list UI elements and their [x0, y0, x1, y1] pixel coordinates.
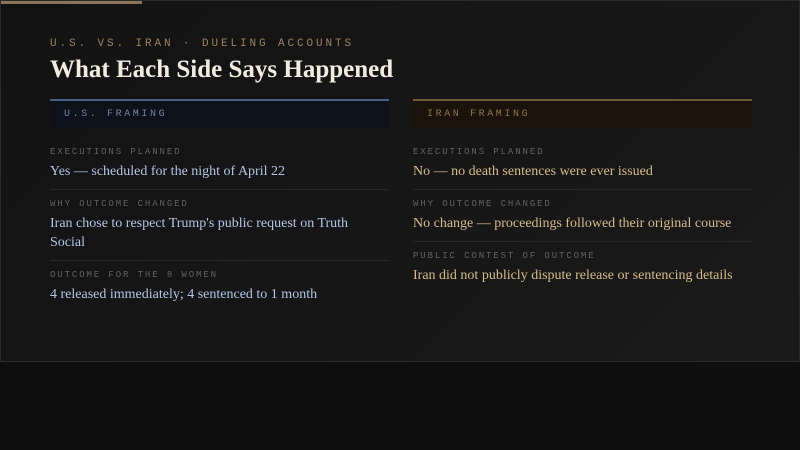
eyebrow: U.S. VS. IRAN · DUELING ACCOUNTS [50, 38, 354, 50]
row: outcome for 8 women [50, 270, 317, 302]
row: executions planned: Yes — scheduled for the night of April 22 [50, 164, 285, 179]
row: executions planned: EXECUTIONS PLANNED [413, 147, 544, 157]
header: Iran framing [413, 99, 752, 128]
row: outcome for 8 women: 4 released immediately; 4 sentenced to 1 month [50, 287, 317, 302]
row: public contest: PUBLIC CONTEST OF OUTCOME [413, 251, 596, 261]
row: why outcome changed [50, 190, 389, 261]
header: U.S. framing: U.S. FRAMING [64, 109, 167, 120]
accent bar [1, 1, 142, 4]
header: Iran framing: IRAN FRAMING [427, 109, 530, 120]
header: U.S. framing [50, 99, 389, 128]
row: outcome for 8 women: OUTCOME FOR THE 8 WOMEN [50, 270, 218, 280]
panel: U.S. framing [50, 99, 389, 302]
row: public contest [413, 251, 733, 283]
row: executions planned [413, 138, 752, 190]
row: executions planned [50, 138, 389, 190]
row: why outcome changed: No change — proceedings followed their original course [413, 216, 731, 231]
title: What Each Side Says Happened [50, 56, 393, 83]
panel: Iran framing [413, 99, 752, 283]
row: why outcome changed: WHY OUTCOME CHANGED [50, 199, 189, 209]
row: why outcome changed: Iran chose to respect Trump's public request on Truth Social [50, 216, 348, 250]
row: why outcome changed: WHY OUTCOME CHANGED [413, 199, 552, 209]
row: public contest: Iran did not publicly dispute release or sentencing details [413, 268, 733, 283]
row: why outcome changed [413, 190, 752, 242]
row: executions planned: EXECUTIONS PLANNED [50, 147, 181, 157]
row: executions planned: No — no death sentences were ever issued [413, 164, 653, 179]
